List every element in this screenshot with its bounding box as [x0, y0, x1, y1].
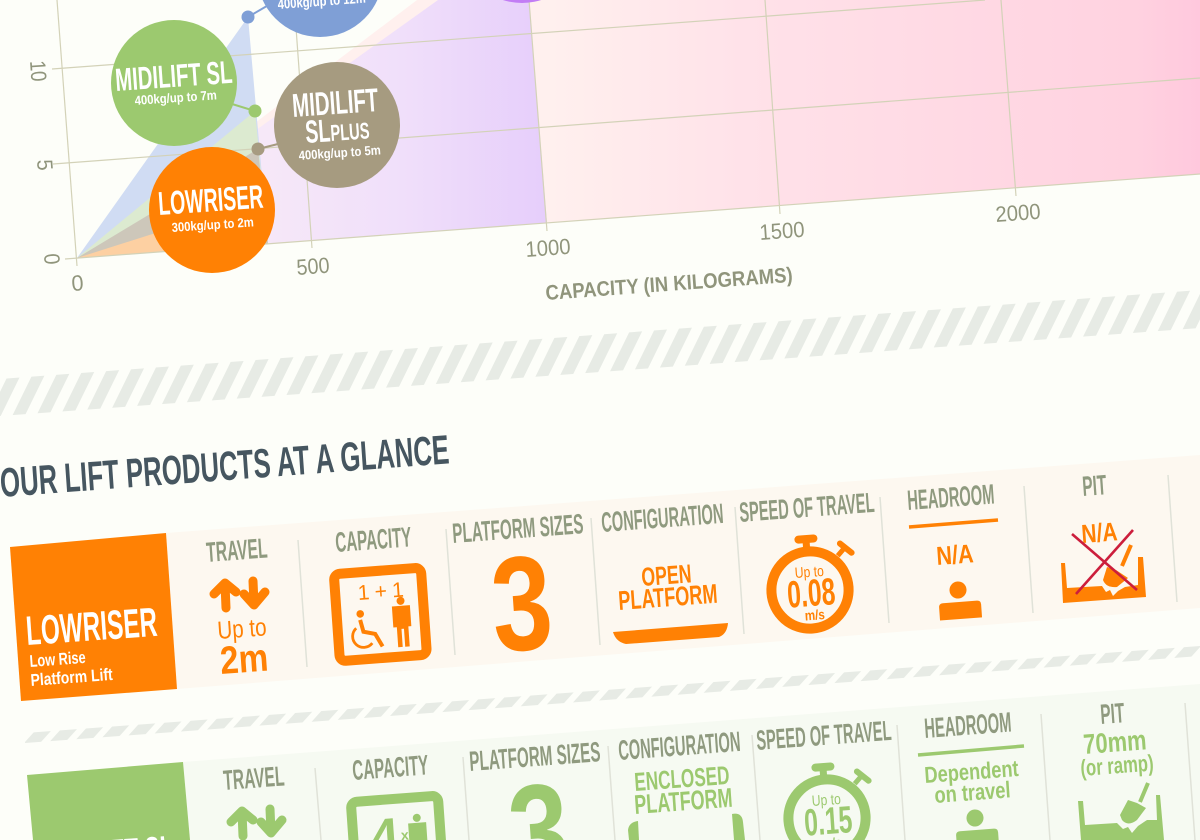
pit column: 70mm	[1082, 724, 1147, 760]
speed of travel column: SPEED OF TRAVEL	[738, 487, 875, 528]
icon: lift car with wheelchair user and person: 1 + 1	[357, 579, 405, 605]
area: orange range	[77, 215, 212, 258]
icon: stopwatch: 0.08	[786, 571, 837, 617]
x axis title: CAPACITY (IN KILOGRAMS)	[545, 264, 793, 305]
x axis labels: 500	[296, 253, 330, 280]
configuration column	[600, 498, 728, 644]
icon: person	[937, 580, 982, 620]
dashed row divider	[25, 646, 1200, 743]
row background	[183, 684, 1200, 840]
area: pink upper range	[77, 0, 1200, 258]
pit column: N/A	[1080, 516, 1119, 549]
icon: up and down arrows	[214, 581, 265, 608]
headroom column	[906, 479, 998, 620]
speed of travel column	[738, 487, 875, 631]
column dividers	[315, 703, 1195, 840]
pit column	[1078, 697, 1164, 840]
icon: person	[954, 808, 999, 840]
configuration column: CONFIGURATION	[617, 726, 741, 766]
hatched section divider	[0, 290, 1200, 416]
capacity column	[351, 749, 444, 840]
chart grid lines	[52, 0, 1200, 266]
bubble: Midilift SL Plus: 400kg/up to 5m	[298, 142, 381, 163]
capacity column	[334, 521, 427, 661]
bubble: Lowriser: LOWRISER	[157, 179, 265, 223]
pit column: (or ramp)	[1080, 750, 1154, 781]
pin: purple lift	[459, 0, 585, 3]
configuration column: PLATFORM	[633, 782, 733, 820]
x axis labels	[71, 199, 1041, 296]
icon: pit with spade	[1078, 783, 1164, 840]
area: blue range	[77, 17, 268, 258]
row background	[166, 455, 1200, 689]
headroom column: HEADROOM	[906, 479, 995, 516]
icon: enclosed platform walls	[628, 814, 745, 840]
bubble: Midilift SL: MIDILIFT SL	[114, 54, 233, 98]
platform sizes column	[468, 736, 601, 840]
icon: stopwatch: Up to	[794, 563, 824, 582]
column dividers	[298, 475, 1177, 667]
x axis labels: 2000	[995, 199, 1041, 227]
headroom column: HEADROOM	[923, 707, 1012, 744]
row: Lowriser	[10, 455, 1200, 701]
pit column: PIT	[1081, 469, 1107, 502]
bubble: Midilift SL: 400kg/up to 7m	[134, 87, 217, 108]
headroom column	[918, 707, 1024, 840]
bubble: Lowriser: 300kg/up to 2m	[171, 214, 254, 235]
configuration column	[617, 726, 745, 840]
x axis labels: 0	[71, 270, 84, 296]
bubble chart: capacity vs travel	[25, 0, 1200, 305]
title: OUR LIFT PRODUCTS AT A GLANCE	[0, 426, 451, 506]
travel column	[205, 532, 270, 683]
travel column: TRAVEL	[205, 532, 268, 568]
bubble: Midilift SL Plus: MIDILIFT	[291, 82, 380, 125]
platform sizes column	[451, 508, 584, 681]
headroom column: N/A	[935, 538, 975, 571]
configuration column: ENCLOSED	[633, 760, 730, 797]
y axis labels	[25, 60, 65, 265]
platform sizes column: PLATFORM SIZES	[468, 736, 601, 777]
name panel: Platform Lift	[30, 665, 114, 690]
x axis labels: 1500	[759, 217, 805, 245]
name panel: Low Rise	[29, 648, 86, 671]
bubble: blue midilift	[242, 0, 383, 37]
travel column: Up to	[216, 613, 267, 645]
icon: lift car with four persons	[351, 796, 444, 840]
icon: stopwatch: Up to	[811, 791, 841, 810]
travel column: TRAVEL	[222, 760, 285, 796]
name panel	[10, 533, 177, 701]
row: Midilift SL	[27, 684, 1200, 840]
configuration column: CONFIGURATION	[600, 498, 724, 538]
platform sizes column: 3	[487, 527, 557, 681]
icon: stopwatch: m/s	[804, 606, 825, 624]
y axis labels: 5	[32, 159, 58, 171]
area: purple range	[77, 0, 547, 258]
y axis labels: 10	[25, 60, 51, 82]
x axis labels: 1000	[525, 234, 571, 262]
bubble: Midilift SL Plus: SL	[304, 112, 331, 150]
area: green range	[77, 111, 268, 258]
configuration column: OPEN	[640, 558, 692, 592]
headroom column: Dependent	[924, 755, 1020, 788]
speed of travel column	[755, 715, 892, 840]
bubble: Midilift SL Plus	[252, 62, 400, 188]
pit column	[1061, 469, 1146, 603]
icon: open platform	[613, 623, 728, 644]
travel column	[222, 760, 285, 836]
name panel	[27, 762, 190, 840]
icon: stopwatch	[768, 532, 857, 631]
icon: up and down arrows	[231, 809, 282, 836]
icon: crossed-out pit with spade	[1061, 530, 1146, 603]
travel column: 2m	[219, 636, 270, 683]
pit column: PIT	[1099, 697, 1125, 730]
bubble: Midilift SL	[111, 20, 262, 146]
capacity column: CAPACITY	[334, 521, 413, 558]
platform sizes column: PLATFORM SIZES	[451, 508, 584, 549]
bubble: Lowriser	[149, 147, 275, 273]
headroom column: on travel	[934, 776, 1011, 808]
area: brown range	[77, 149, 268, 258]
y axis labels: 0	[39, 253, 65, 265]
configuration column: PLATFORM	[617, 578, 718, 616]
speed of travel column: SPEED OF TRAVEL	[755, 715, 892, 756]
capacity column: CAPACITY	[351, 749, 430, 786]
name panel: LOWRISER	[24, 599, 159, 654]
icon: stopwatch	[785, 760, 874, 840]
bubble: Midilift SL Plus: PLUS	[330, 117, 370, 146]
